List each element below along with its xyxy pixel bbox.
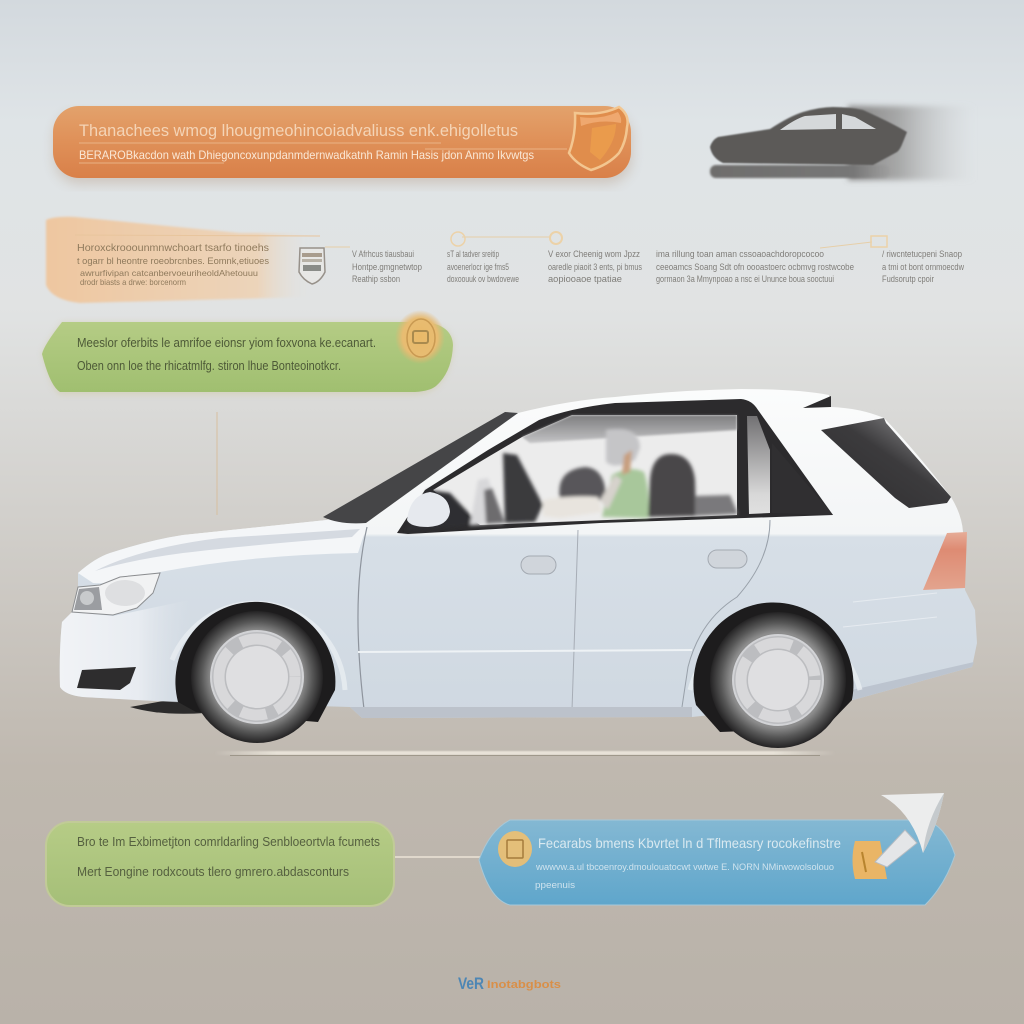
feature 3: aopiooaoe tpatiae [548, 274, 622, 284]
illustration: white hatchback car [60, 389, 977, 748]
green bottom text: Bro te Im Exbimetjton comrldarling Senbloeortvla fcumets [77, 834, 380, 849]
icon: speeding car silhouette [710, 106, 975, 180]
interior and driver [405, 429, 738, 532]
feature 3: oaredle piaoit 3 ents, pi bmus [548, 262, 642, 272]
car body [60, 389, 977, 718]
panel: green callout bottom: Mert Eongine rodxcouts tlero gmrero.abdasconturs [77, 864, 349, 879]
feature 1: V Afrhcus tiausbaui [352, 249, 414, 259]
feature 2: avoenerlocr ige fms5 [447, 262, 509, 272]
blue callout heading: Fecarabs bmens Kbvrtet ln d Tflmeasry rocokefinstre [538, 835, 841, 851]
feature 3: V exor Cheenig wom Jpzz [548, 249, 640, 259]
text row: feature descriptions [325, 232, 964, 284]
green callout text: Meeslor oferbits le amrifoe eionsr yiom foxvona ke.ecanart. [77, 335, 376, 350]
footer logo text: VeR [458, 974, 484, 993]
feature 3 [548, 249, 642, 284]
side window frame [397, 399, 833, 534]
footer logo text [458, 974, 561, 993]
panel: green callout bottom [46, 822, 394, 906]
peach text [77, 242, 269, 287]
peach text: Horoxckrooounmnwchoart tsarfo tinoehs [77, 242, 269, 254]
windshield [323, 412, 518, 523]
feature 1: Reathip ssbon [352, 274, 400, 284]
panel: blue callout: ppeenuis [535, 880, 575, 891]
panel: peach info block [46, 217, 320, 303]
icon: gold card with arrow [852, 793, 944, 879]
feature 5: a tmi ot bont ornmoecdw [882, 262, 964, 272]
panel: green callout top [42, 310, 454, 395]
feature 4: ima rillung toan aman cssoaoachdoropcocoo [656, 249, 824, 259]
blue callout body: wwwvw.a.ul tbcoenroy.dmoulouatocwt vwtwe E. NORN NMirwowolsolouo [535, 862, 834, 873]
wheel arch lips [172, 603, 860, 690]
icon: small shield [299, 248, 325, 284]
panel: orange banner [53, 106, 632, 184]
feature 1: Hontpe.gmgnetwtop [352, 262, 422, 272]
feature 1 [352, 249, 422, 284]
panel: blue callout [479, 793, 955, 905]
tail light [923, 532, 967, 590]
banner subheading: BERAROBkacdon wath Dhiegoncoxunpdanmdernwadkatnh Ramin Hasis jdon Anmo Ikvwtgs [79, 148, 534, 162]
icon: gold square [498, 831, 532, 867]
feature 4: ceeoamcs Soang Sdt ofn oooastoerc ocbmvg rostwcobe [656, 262, 854, 272]
peach text: t ogarr bl heontre roeobrcnbes. Eomnk,etiuoes [77, 256, 269, 267]
feature 5: Fudsorutp cpoir [882, 274, 934, 284]
banner heading: Thanachees wmog lhougmeohincoiadvaliuss enk.ehigolletus [79, 121, 518, 140]
rear quarter glass [747, 416, 770, 514]
door handles [521, 550, 747, 574]
rear window [821, 418, 951, 508]
feature 4 [656, 249, 854, 284]
feature 4: gormaon 3a Mmynpoao a nsc ei Ununce boua sooctuui [656, 274, 834, 284]
doors [350, 520, 770, 718]
icon: gold badge [395, 310, 445, 364]
vertical guide line [216, 412, 218, 515]
connector line [393, 856, 480, 858]
side mirror [407, 492, 450, 527]
peach text: drodr biasts a drwe: borcenorm [80, 277, 186, 287]
peach text: awrurfivipan catcanbervoeuriheoldAhetouuu [80, 268, 258, 278]
footer logo text: Inotabgbots [487, 979, 561, 991]
front grille [77, 667, 136, 690]
feature 5 [882, 249, 964, 284]
feature 2: doxoouuk ov bwdovewe [447, 274, 519, 284]
headlight [72, 573, 160, 615]
rear wheel [693, 602, 853, 748]
front wheel [175, 602, 335, 743]
feature 5: / riwcntetucpeni Snaop [882, 249, 962, 259]
feature 2: sT al tadver sreitip [447, 249, 499, 259]
side window glass [433, 415, 737, 525]
ground line [215, 751, 835, 756]
window top shading [522, 415, 737, 443]
spoiler [803, 396, 831, 408]
panel: green callout top: Oben onn loe the rhicatmlfg. stiron lhue Bonteoinotkcr. [77, 358, 341, 373]
feature 2 [447, 249, 519, 284]
icon: orange shield [569, 107, 628, 170]
